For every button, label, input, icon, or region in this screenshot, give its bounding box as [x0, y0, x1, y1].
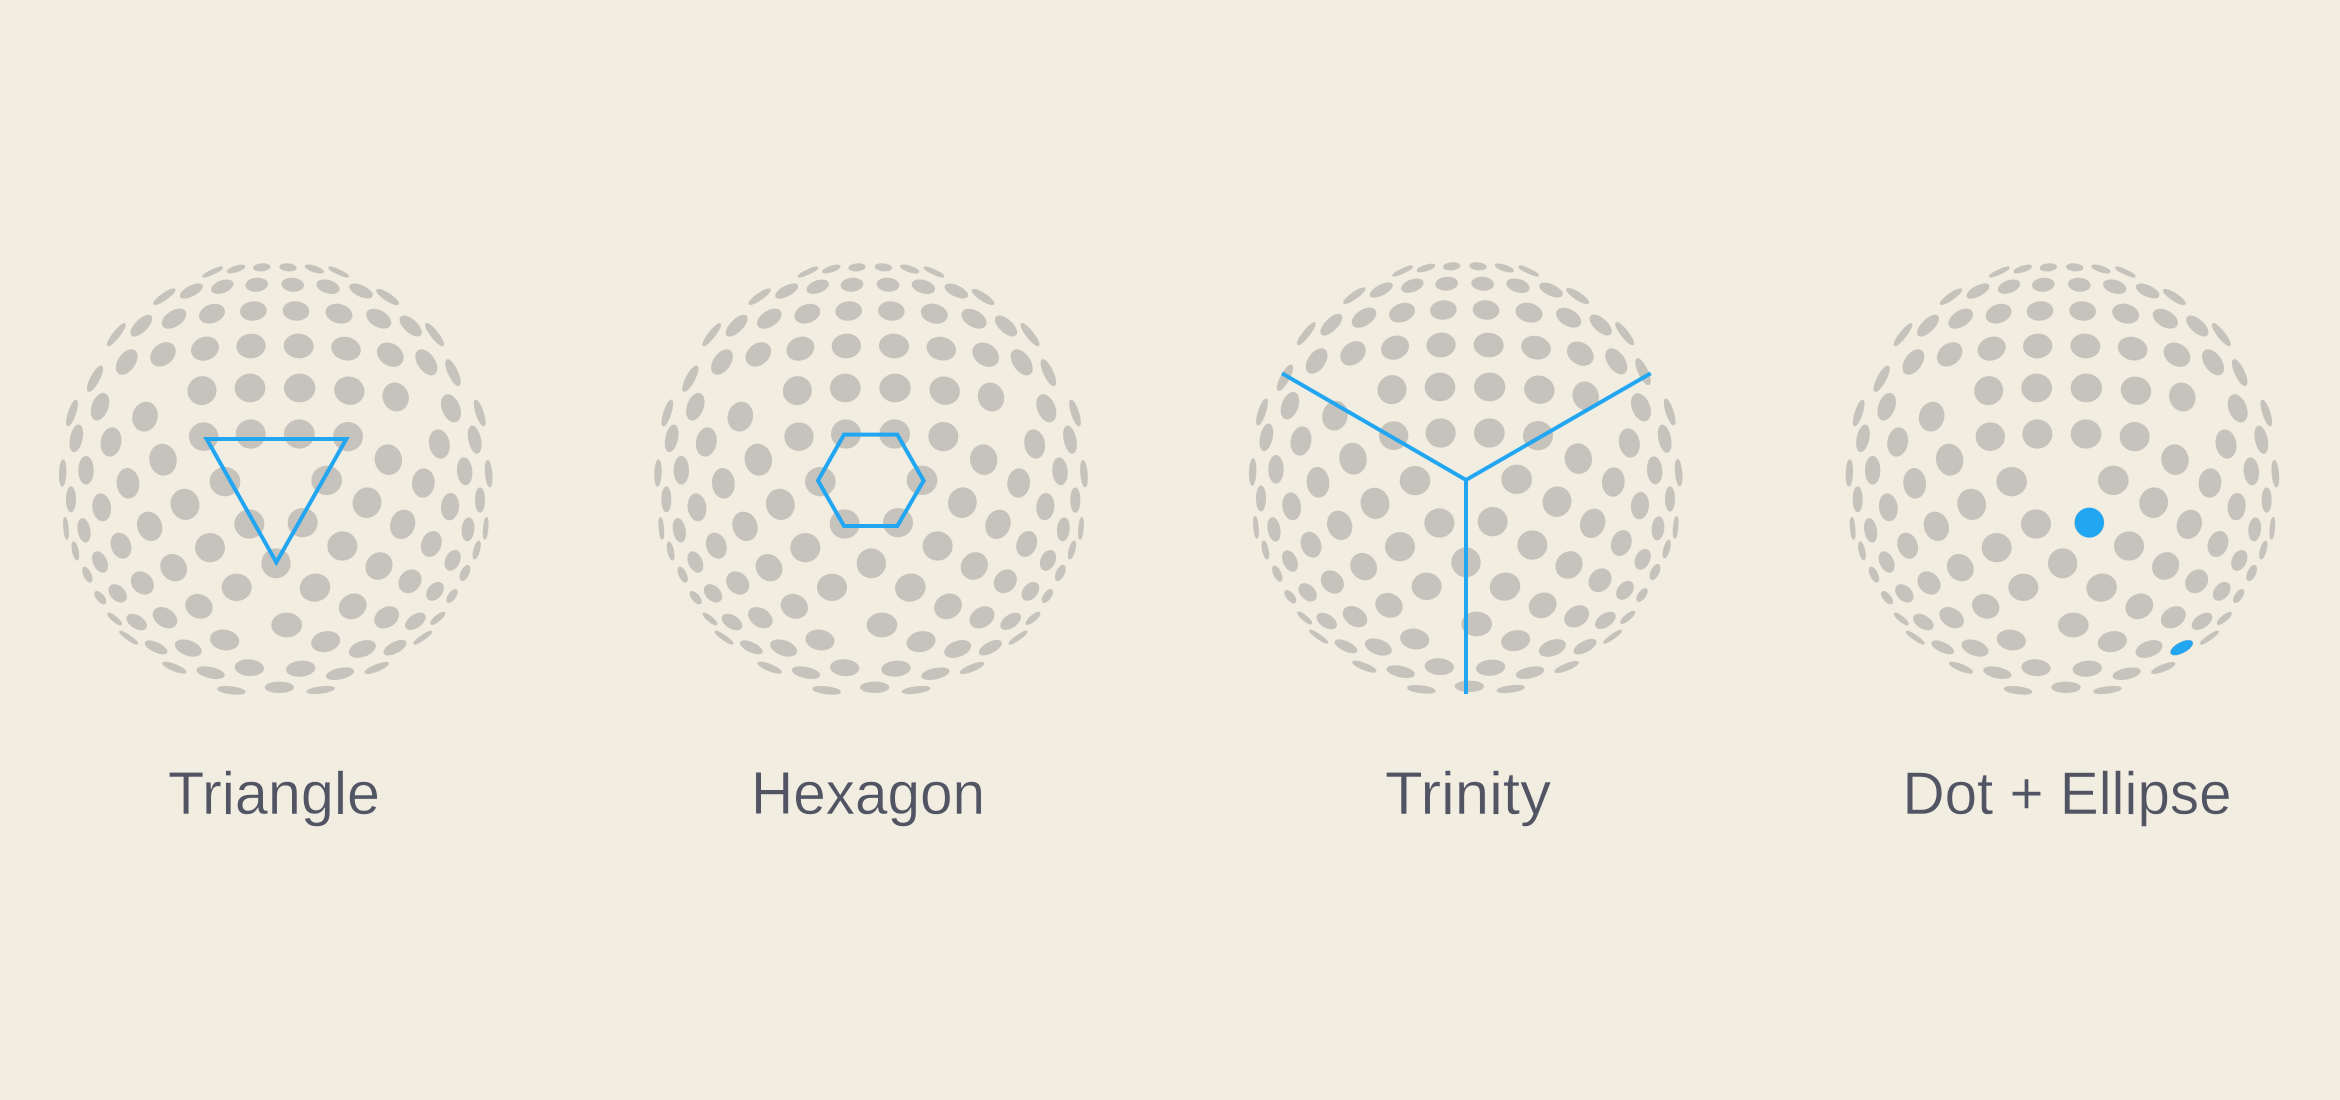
panel: trinity sphere: [1249, 262, 1683, 694]
blue ellipse: [2168, 637, 2195, 658]
dimple pattern: triangle sphere: [59, 263, 493, 695]
panel: triangle sphere: [59, 263, 493, 695]
label: Dot + Ellipse: Dot + Ellipse: [1902, 760, 2232, 827]
dimple pattern: hexagon sphere: [655, 263, 1088, 695]
dimple pattern: dot and ellipse sphere: [1846, 263, 2279, 695]
dimple pattern: trinity sphere: [1249, 262, 1683, 694]
label: Triangle: Triangle: [168, 760, 380, 827]
blue triangle outline: [207, 439, 346, 562]
blue trinity lines: [1282, 373, 1651, 694]
panel: dot and ellipse sphere: [1846, 263, 2279, 695]
label: Hexagon: Hexagon: [751, 760, 985, 827]
label: Trinity: Trinity: [1385, 760, 1551, 827]
blue hexagon outline: [818, 435, 924, 526]
blue dot: [2075, 508, 2104, 538]
panel: hexagon sphere: [655, 263, 1088, 695]
